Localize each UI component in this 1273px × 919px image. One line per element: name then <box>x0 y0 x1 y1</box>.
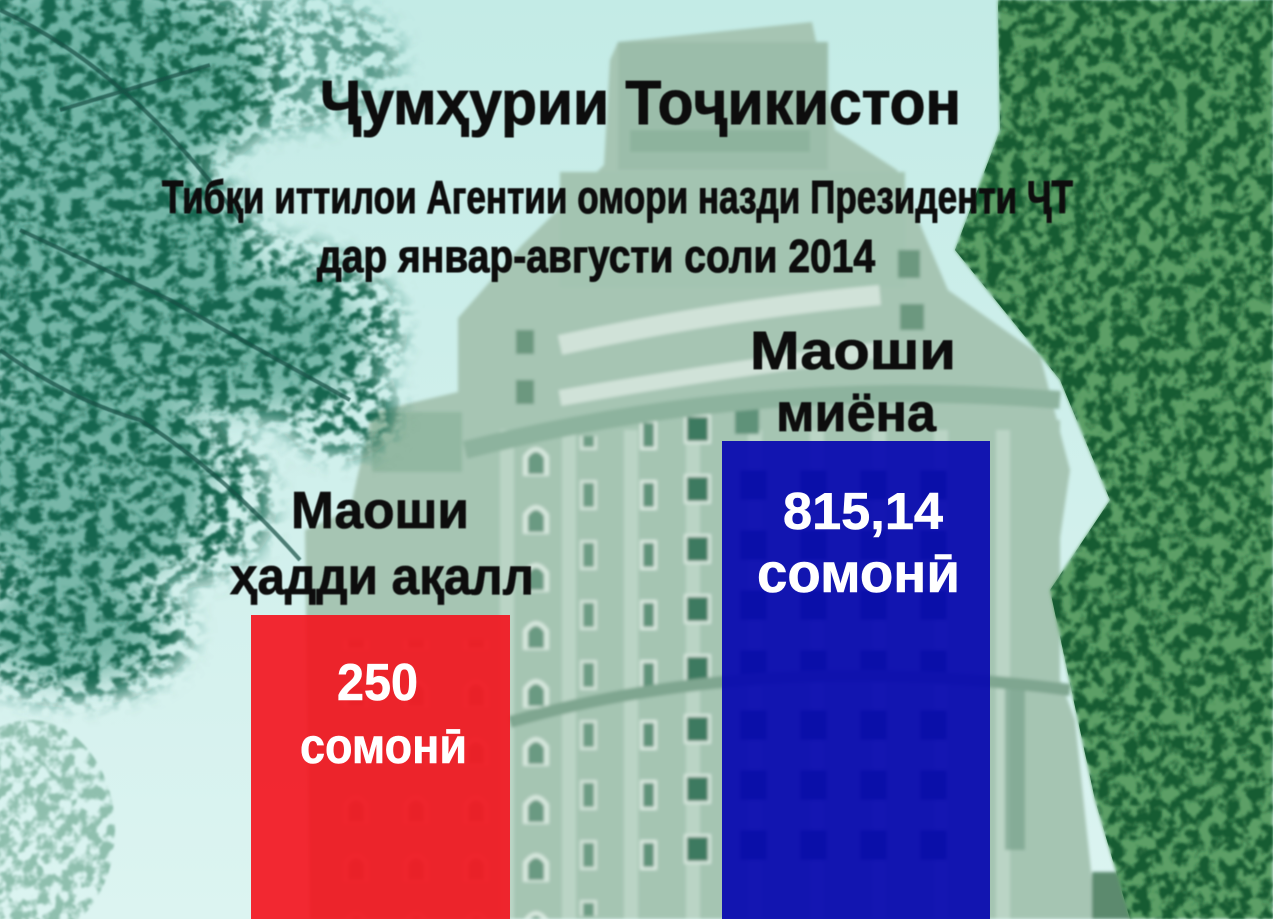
label: minimum wage: ҳадди ақалл <box>230 548 534 606</box>
building left wing <box>372 412 462 472</box>
left tree foliage <box>0 0 400 700</box>
value: 250: 250 <box>337 654 418 712</box>
title: Ҷумҳурии Тоҷикистон <box>320 69 961 138</box>
subtitle line 2: дар январ-августи соли 2014 <box>317 230 875 282</box>
unit: somoni: сомонӣ <box>300 718 467 774</box>
value: 815,14: 815,14 <box>783 483 943 541</box>
label: minimum wage: Маоши <box>291 482 469 540</box>
red bar: minimum wage <box>251 615 510 919</box>
label: average wage: миёна <box>776 383 937 443</box>
right tree base <box>955 0 1273 919</box>
right tree foliage <box>940 0 1273 919</box>
left tree branches <box>0 10 350 560</box>
blue bar: average wage <box>722 441 990 919</box>
building tower top <box>618 42 828 170</box>
unit: somoni: сомонӣ <box>757 541 960 604</box>
building <box>305 22 1132 919</box>
label: average wage <box>750 321 956 443</box>
label: minimum wage <box>230 482 534 606</box>
label: average wage: Маоши <box>750 321 956 381</box>
left tree lower foliage <box>0 720 115 919</box>
left tree soft underlayer <box>0 0 360 680</box>
